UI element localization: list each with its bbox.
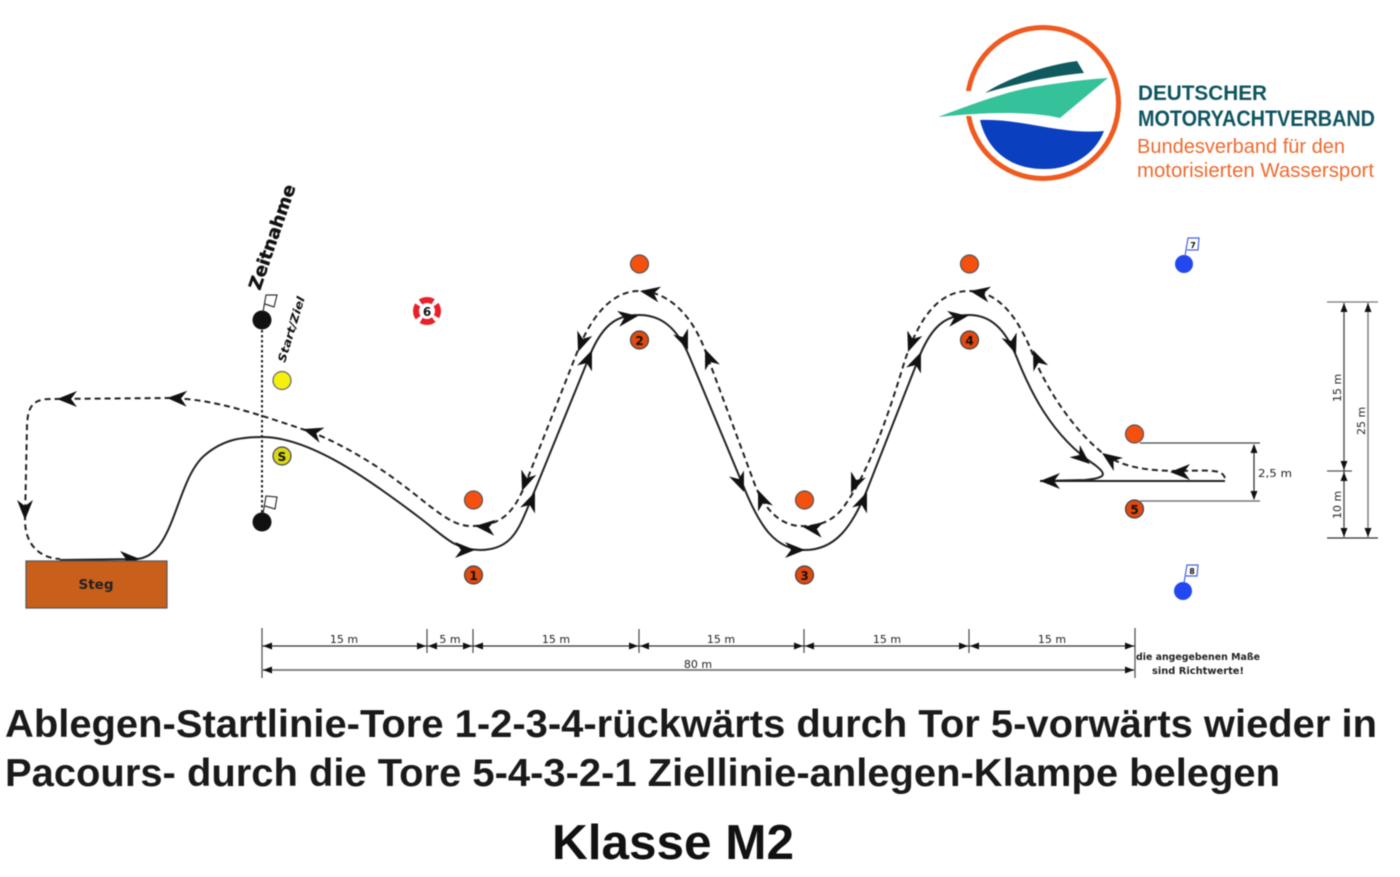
return course path [17,283,1225,559]
dock: Steg [78,577,114,593]
lifebuoy 6 [416,300,438,322]
description [5,703,1377,795]
horizontal dimensions: 15 m [1038,633,1066,646]
note on guideline values: die angegebenen Maße [1136,652,1260,663]
vertical dimensions: 15 m [1331,374,1344,402]
blue buoy 7 [1175,238,1199,273]
numbered gate buoys: 4 [965,334,974,348]
description: Pacours- durch die Tore 5-4-3-2-1 Ziellinie-anlegen-Klampe belegen [5,752,1280,795]
vertical dimensions: 25 m [1355,407,1368,435]
logo [938,28,1375,182]
horizontal dimensions: 15 m [707,633,735,646]
upper start buoy with flag [252,295,277,330]
description: Ablegen-Startlinie-Tore 1-2-3-4-rückwärts durch Tor 5-vorwärts wieder in [5,703,1377,746]
lifebuoy 6: 6 [423,305,431,319]
logo boat hull [938,78,1108,118]
lower start buoy with flag [252,496,277,532]
vertical dimensions: 10 m [1331,491,1344,519]
horizontal dimensions: 80 m [684,658,712,671]
timing label: Zeitnahme [246,182,301,293]
logo text: motorisierten Wassersport [1137,160,1374,182]
logo water [980,120,1104,169]
numbered gate buoys: 5 [1130,503,1139,517]
dock [26,561,167,608]
note on guideline values [1136,652,1260,677]
horizontal dimensions: 15 m [542,633,570,646]
note on guideline values: sind Richtwerte! [1152,666,1244,677]
start finish label: Start/Ziel [275,295,308,364]
numbered gate buoys: 2 [635,334,644,348]
yellow buoy S [273,447,291,465]
logo text: Bundesverband für den [1137,136,1345,158]
yellow buoy S: S [278,450,286,464]
gate 5 width dimension: 2,5 m [1258,467,1292,480]
yellow buoy [273,372,291,390]
blue buoy 8 [1174,565,1198,600]
horizontal dimensions: 5 m [439,633,461,646]
numbered gate buoys: 3 [800,569,809,583]
numbered gate buoys [464,331,1144,584]
blue buoy 8: 8 [1189,567,1195,576]
gate 5 width dimension [1140,443,1292,501]
vertical dimensions [1327,302,1378,538]
logo text: MOTORYACHTVERBAND [1138,106,1375,131]
logo gap [955,91,979,116]
gate buoys [464,255,1144,509]
numbered gate buoys: 1 [469,569,478,583]
horizontal dimensions [262,628,1135,678]
start finish line [261,320,263,522]
logo text: DEUTSCHER [1138,82,1267,105]
blue buoy 7: 7 [1190,241,1196,250]
horizontal dimensions: 15 m [873,633,901,646]
forward course path [60,308,1225,567]
horizontal dimensions: 15 m [330,633,358,646]
logo boat cabin [985,61,1084,93]
class title: Klasse M2 [552,816,794,870]
logo text [1137,82,1375,182]
logo ring [968,28,1118,178]
